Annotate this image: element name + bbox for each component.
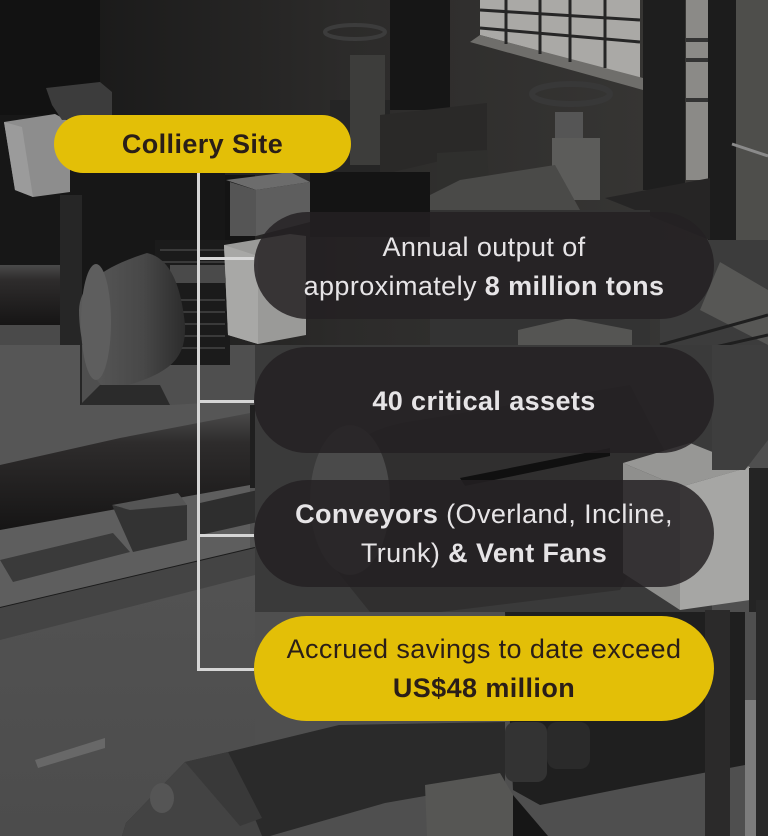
panel: annual output: approximately 8 million tons — [304, 270, 664, 300]
left machinery — [0, 115, 225, 340]
motor drum — [79, 253, 185, 390]
main pipe — [0, 413, 250, 530]
panel: annual output: Annual output of — [382, 232, 586, 262]
heading pill: Colliery Site: Colliery Site — [122, 129, 283, 159]
heading pill: Colliery Site — [54, 115, 351, 173]
panel: critical assets: 40 critical assets — [372, 386, 596, 416]
right upper pipe — [605, 178, 710, 240]
panel: conveyors — [254, 480, 714, 587]
right junction box — [623, 443, 750, 610]
upper pipe — [380, 103, 487, 175]
pipe support block — [112, 493, 187, 552]
lower pipe — [122, 722, 505, 836]
panel: accrued savings — [254, 616, 714, 721]
panel: critical assets — [254, 347, 714, 453]
lower floor — [0, 405, 255, 836]
lower floor right — [255, 612, 768, 836]
panel: conveyors: Conveyors (Overland, Incline, — [295, 499, 673, 529]
window — [480, 0, 640, 78]
panel: conveyors: Trunk) & Vent Fans — [361, 538, 607, 568]
motor top — [428, 165, 580, 212]
box under panel — [518, 318, 632, 400]
tree connector lines — [197, 173, 254, 671]
cooling fins — [155, 240, 230, 365]
panel: accrued savings: US$48 million — [393, 672, 575, 702]
rear valve — [325, 25, 385, 165]
valve with handwheel — [532, 84, 610, 200]
panel: accrued savings: Accrued savings to date exceed — [287, 634, 681, 664]
upper wall — [0, 0, 768, 345]
control boxes — [4, 114, 70, 197]
panel: annual output — [254, 212, 714, 319]
